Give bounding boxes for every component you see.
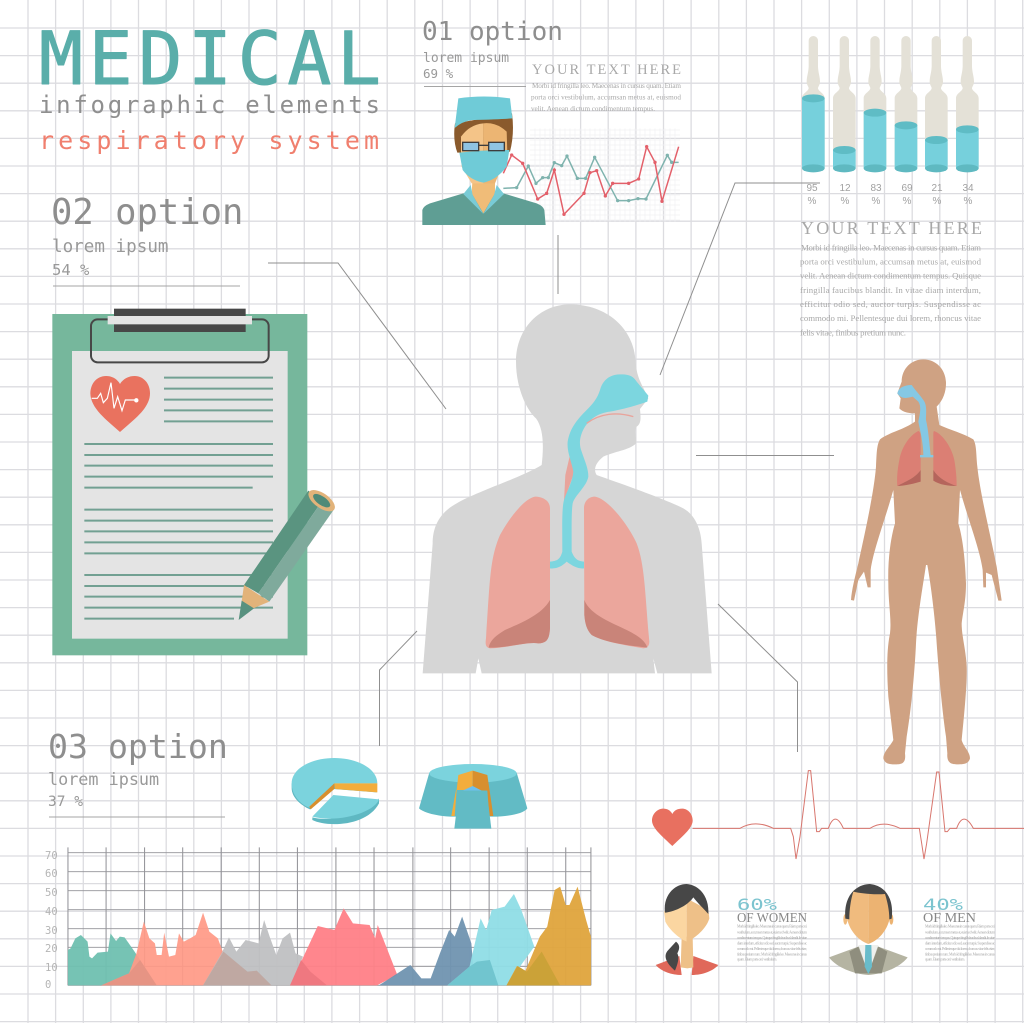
ampoule 6: 34%: [956, 36, 979, 172]
stat: 60% of women: diam interdum, efficitur odio sed, auctor turpis. Suspendisse ac: [737, 942, 807, 946]
icon: pie chart: [292, 758, 379, 824]
icon: cutaway cylinder chart: [419, 764, 527, 829]
ampoule percentages: 69: [901, 183, 913, 194]
clipboard: [52, 309, 338, 655]
heading: 03 option: 03 option: [48, 727, 228, 766]
ampoule percentages: 34: [962, 183, 974, 194]
text block: top your text here: porta orci vestibulum, accumsan metus at, euismod: [531, 94, 681, 102]
ampoule percentages: 21: [931, 183, 943, 194]
stat: 60% of women: 60%: [737, 895, 777, 914]
left lung: [486, 497, 550, 648]
text block: right your text here: velit. Aenean dictum condimentum tempus. Quisque: [800, 271, 981, 281]
ampoule percentages: [806, 183, 974, 207]
text block: right your text here: felis vitae, finibus pretium nunc.: [800, 327, 906, 337]
text block: right your text here: efficitur odio sed, auctor turpis. Suspendisse ac: [800, 299, 981, 309]
area: salmon: [101, 913, 223, 985]
area: red: [290, 908, 397, 985]
subtitle: infographic elements: infographic elements: [39, 91, 380, 119]
chart y-axis labels: 0: [45, 979, 51, 991]
chart y-axis labels: 50: [45, 887, 58, 899]
stat: 40% of men: OF MEN: [923, 911, 976, 926]
area: light cyan: [447, 894, 534, 985]
area: slate blue: [379, 917, 473, 985]
heading: 01 option: 69 %: [423, 66, 454, 81]
heading: 03 option: lorem ipsum: [48, 769, 159, 789]
heading: 01 option: [422, 17, 563, 87]
chart axes and gridlines: [68, 847, 591, 985]
ampoule percentages: 83: [870, 183, 882, 194]
connector lines: [268, 183, 834, 752]
text block: right your text here: commodo mi. Pellentesque dui lorem, rhoncus vitae: [800, 313, 981, 323]
ekg with heart: [652, 771, 1024, 859]
ampoule percentages: %: [933, 196, 942, 207]
stat: 60% of women: Morbi id fringilla leo. Maecenas in cursus quam. Etiam porta orci: [737, 924, 807, 928]
area: grey: [203, 920, 303, 985]
icon: woman: [656, 884, 718, 975]
line chart: [503, 128, 680, 222]
heading: 01 option: lorem ipsum: [423, 51, 509, 66]
full body figure: [851, 359, 1002, 764]
title: MEDICAL: [39, 17, 381, 102]
stat: 60% of women: vestibulum, accumsan metus at, euismod velit. Aenean dictum: [737, 930, 807, 935]
ampoule bar chart: [802, 36, 979, 172]
heading: 02 option: [51, 192, 243, 286]
ampoule 2: 12%: [833, 36, 856, 172]
ampoule 4: 69%: [895, 36, 917, 172]
stat: 40% of men: condimentum tempus. Quisque fringilla faucibus blandit. In vitae: [925, 936, 995, 940]
ampoule percentages: %: [964, 196, 973, 207]
stat: 40% of men: 40%: [923, 895, 963, 914]
ampoule percentages: 95: [806, 183, 818, 194]
text block: right your text here: fringilla faucibus blandit. In vitae diam interdum,: [800, 285, 981, 295]
ampoule 3: 83%: [864, 36, 886, 172]
stat: 40% of men: [923, 895, 996, 962]
stat: 40% of men: quam. Etiam porta orci vestibulum.: [925, 958, 965, 962]
esophagus: [564, 455, 575, 501]
stat: 60% of women: quam. Etiam porta orci vestibulum.: [737, 958, 777, 962]
icon: man: [829, 884, 908, 975]
ampoule percentages: %: [872, 196, 881, 207]
chart y-axis labels: 70: [45, 850, 58, 862]
icon: doctor: [422, 96, 546, 225]
text block: top your text here: velit. Aenean dictum condimentum tempus.: [531, 105, 655, 113]
icon: heart with pulse: [90, 376, 150, 432]
subtitle: respiratory system: respiratory system: [39, 126, 379, 155]
heading: 02 option: 54 %: [52, 261, 90, 279]
heading: 03 option: 37 %: [48, 794, 83, 810]
chart y-axis labels: 30: [45, 925, 58, 937]
text block: right your text here: Morbi id fringilla leo. Maecenas in cursus quam. Etiam: [801, 242, 981, 252]
ampoule 5: 21%: [925, 36, 948, 172]
stat: 60% of women: finibus pretium nunc. Morbi id fringilla leo. Maecenas in cursus: [737, 952, 808, 956]
stat: 60% of women: OF WOMEN: [737, 911, 807, 926]
text block: right your text here: [800, 218, 982, 337]
stat: 40% of men: Morbi id fringilla leo. Maecenas in cursus quam. Etiam porta orci: [925, 924, 995, 928]
chart y-axis labels: 20: [45, 943, 58, 955]
stat: 40% of men: diam interdum, efficitur odio sed, auctor turpis. Suspendisse ac: [925, 942, 995, 946]
chart y-axis labels: 60: [45, 868, 58, 880]
airway: [550, 374, 648, 568]
text block: top your text here: YOUR TEXT HERE: [532, 62, 681, 78]
stat: 60% of women: condimentum tempus. Quisque fringilla faucibus blandit. In vitae: [737, 936, 807, 940]
area: gold: [507, 887, 591, 985]
ampoule 1: 95%: [802, 36, 825, 172]
text block: right your text here: YOUR TEXT HERE: [801, 218, 982, 238]
area chart: [68, 847, 591, 985]
right lung: [584, 497, 649, 648]
chart y-axis labels: 10: [45, 962, 58, 974]
icon: pencil: [239, 486, 338, 620]
body lungs: [897, 431, 957, 486]
body airway: [897, 385, 933, 457]
ampoule percentages: 12: [839, 183, 851, 194]
stat: 40% of men: commodo mi. Pellentesque dui lorem, rhoncus vitae felis vitae,: [925, 947, 995, 952]
icon: heart: [652, 809, 693, 846]
stat: 60% of women: commodo mi. Pellentesque dui lorem, rhoncus vitae felis vitae,: [737, 947, 807, 952]
text block: top your text here: [531, 62, 681, 113]
area: teal: [68, 933, 144, 985]
central figure: torso with respiratory system: [423, 304, 712, 673]
ampoule percentages: %: [841, 196, 850, 207]
heading: 02 option: lorem ipsum: [52, 237, 169, 257]
ampoule percentages: %: [808, 196, 817, 207]
ampoule percentages: %: [903, 196, 912, 207]
heading: 01 option: 01 option: [422, 17, 563, 47]
text block: top your text here: Morbi id fringilla leo. Maecenas in cursus quam. Etiam: [532, 82, 681, 90]
stat: 40% of men: finibus pretium nunc. Morbi id fringilla leo. Maecenas in cursus: [925, 952, 996, 956]
stat: 60% of women: [737, 895, 808, 962]
heading: 03 option: [48, 727, 228, 818]
title: [39, 17, 381, 155]
text block: right your text here: porta orci vestibulum, accumsan metus at, euismod: [800, 256, 982, 266]
stat: 40% of men: vestibulum, accumsan metus at, euismod velit. Aenean dictum: [925, 930, 995, 935]
chart y-axis labels: 40: [45, 906, 58, 918]
heading: 02 option: 02 option: [51, 192, 243, 233]
chart y-axis labels: [45, 850, 58, 991]
